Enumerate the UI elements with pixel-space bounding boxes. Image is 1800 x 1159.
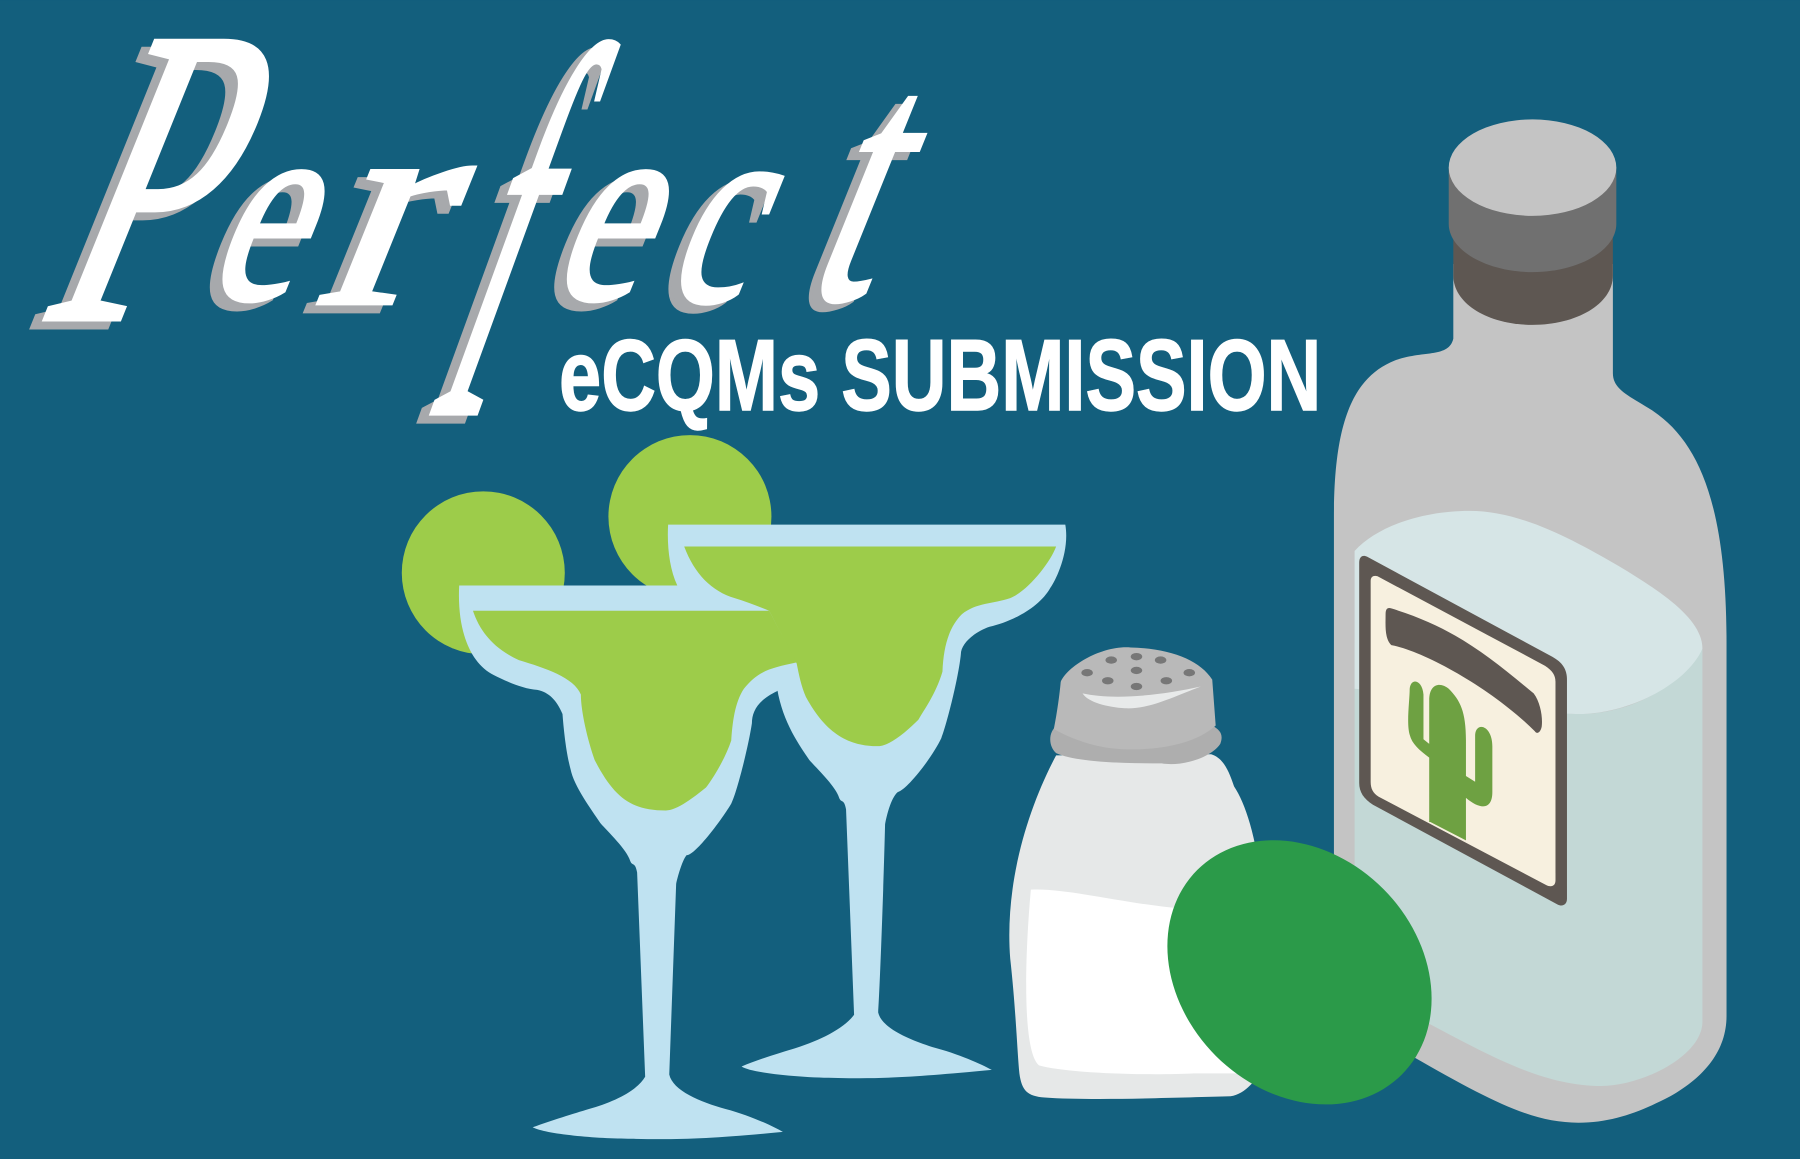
title shadow: Perfect: c bbox=[625, 69, 824, 368]
lime slice: right bbox=[608, 435, 771, 598]
title: Perfect bbox=[0, 0, 993, 528]
label frame bbox=[1359, 556, 1567, 905]
title shadow: Perfect: e bbox=[165, 68, 376, 366]
lime slice: left bbox=[402, 491, 565, 654]
title: Perfect: e bbox=[523, 59, 733, 358]
margarita drink: back bbox=[684, 546, 1056, 746]
bottle cap: neck band bbox=[1453, 224, 1613, 325]
margarita glass: back bbox=[668, 525, 1066, 1078]
subtitle: eCQMs SUBMISSION: eCQMs SUBMISSION bbox=[559, 320, 1321, 432]
label band bbox=[1386, 608, 1542, 733]
title shadow: Perfect: t bbox=[755, 0, 981, 384]
title shadow: Perfect: r bbox=[274, 56, 512, 374]
whole lime bbox=[1114, 786, 1485, 1158]
title shadow: Perfect: e bbox=[510, 68, 720, 366]
title: Perfect: r bbox=[287, 48, 525, 366]
margarita drink: front bbox=[473, 611, 797, 810]
cactus bbox=[1408, 682, 1492, 840]
title: Perfect: c bbox=[637, 61, 837, 360]
shaker highlight bbox=[1083, 686, 1201, 708]
label panel bbox=[1371, 576, 1555, 886]
shaker holes bbox=[1081, 653, 1195, 690]
shaker body bbox=[1009, 754, 1263, 1099]
tequila bottle bbox=[1334, 119, 1727, 1123]
title shadow: Perfect bbox=[0, 0, 981, 536]
salt shaker bbox=[1009, 647, 1263, 1099]
title: Perfect: e bbox=[178, 59, 388, 358]
shaker cap bbox=[1054, 647, 1216, 749]
label bbox=[1359, 556, 1567, 905]
bottle body bbox=[1334, 264, 1727, 1123]
bottle cap: side bbox=[1449, 168, 1616, 272]
margarita glass: front bbox=[459, 585, 797, 1139]
glass highlight bbox=[1355, 511, 1702, 714]
shaker rim bbox=[1050, 726, 1222, 764]
liquid bbox=[1355, 643, 1702, 1086]
bottle cap: top bbox=[1449, 119, 1616, 216]
salt bbox=[1026, 889, 1251, 1074]
